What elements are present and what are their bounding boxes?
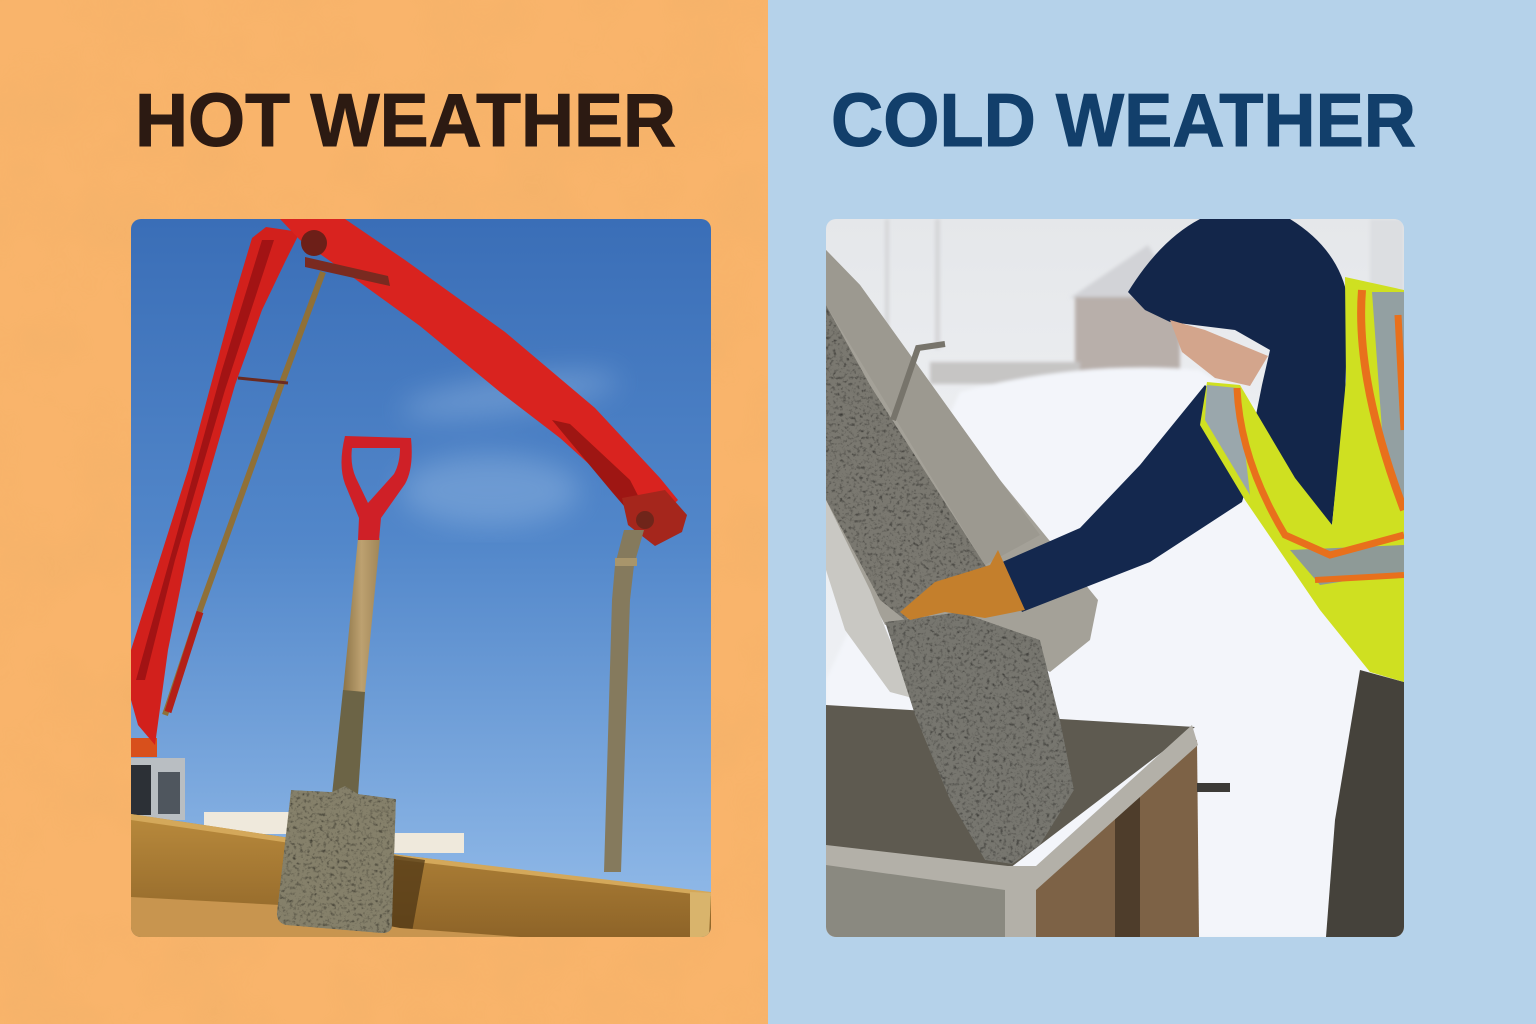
wispy clouds: [399, 362, 621, 526]
bin side panels: [826, 860, 1010, 937]
boom support rod: [165, 272, 323, 715]
panel: hot weather: [0, 0, 768, 1024]
sand ground: [131, 897, 520, 937]
worker: arm: [1000, 385, 1260, 612]
lower boom arm: [131, 227, 300, 745]
shovel shadow: [392, 855, 425, 932]
heading: hot weather: HOT WEATHER: [135, 78, 676, 162]
shovel grip: [342, 436, 412, 540]
chute outer body: [826, 250, 1098, 672]
worker: face: [1170, 320, 1268, 386]
shovel blade: [277, 786, 396, 933]
chute pale rim: [826, 500, 910, 698]
worker: trousers: [1326, 670, 1404, 937]
background shed and snow: [884, 219, 1403, 532]
building and machinery: [204, 812, 288, 834]
heading: cold weather: COLD WEATHER: [831, 78, 1416, 162]
worker: glove: [900, 550, 1025, 620]
worker: hood and torso: [1128, 219, 1348, 525]
hose: [604, 530, 644, 872]
shovel handle: [343, 538, 380, 692]
photo: worker pouring concrete in snow: [826, 219, 1404, 937]
poured concrete: [885, 612, 1074, 864]
wooden form beam: [131, 814, 711, 937]
vest reflective strips: [1372, 292, 1404, 510]
photo: concrete pump boom and shovel under blue sky: [131, 219, 711, 937]
boom joint hardware: [305, 257, 390, 286]
chute hook: [893, 344, 945, 420]
concrete in chute: [826, 305, 1000, 620]
bin rim: [826, 725, 1198, 937]
upper boom arm: [280, 219, 678, 522]
worker: hi-vis vest: [1200, 277, 1404, 682]
panel: cold weather: [768, 0, 1536, 1024]
boom tip: [622, 490, 687, 546]
bin interior: [826, 705, 1195, 868]
